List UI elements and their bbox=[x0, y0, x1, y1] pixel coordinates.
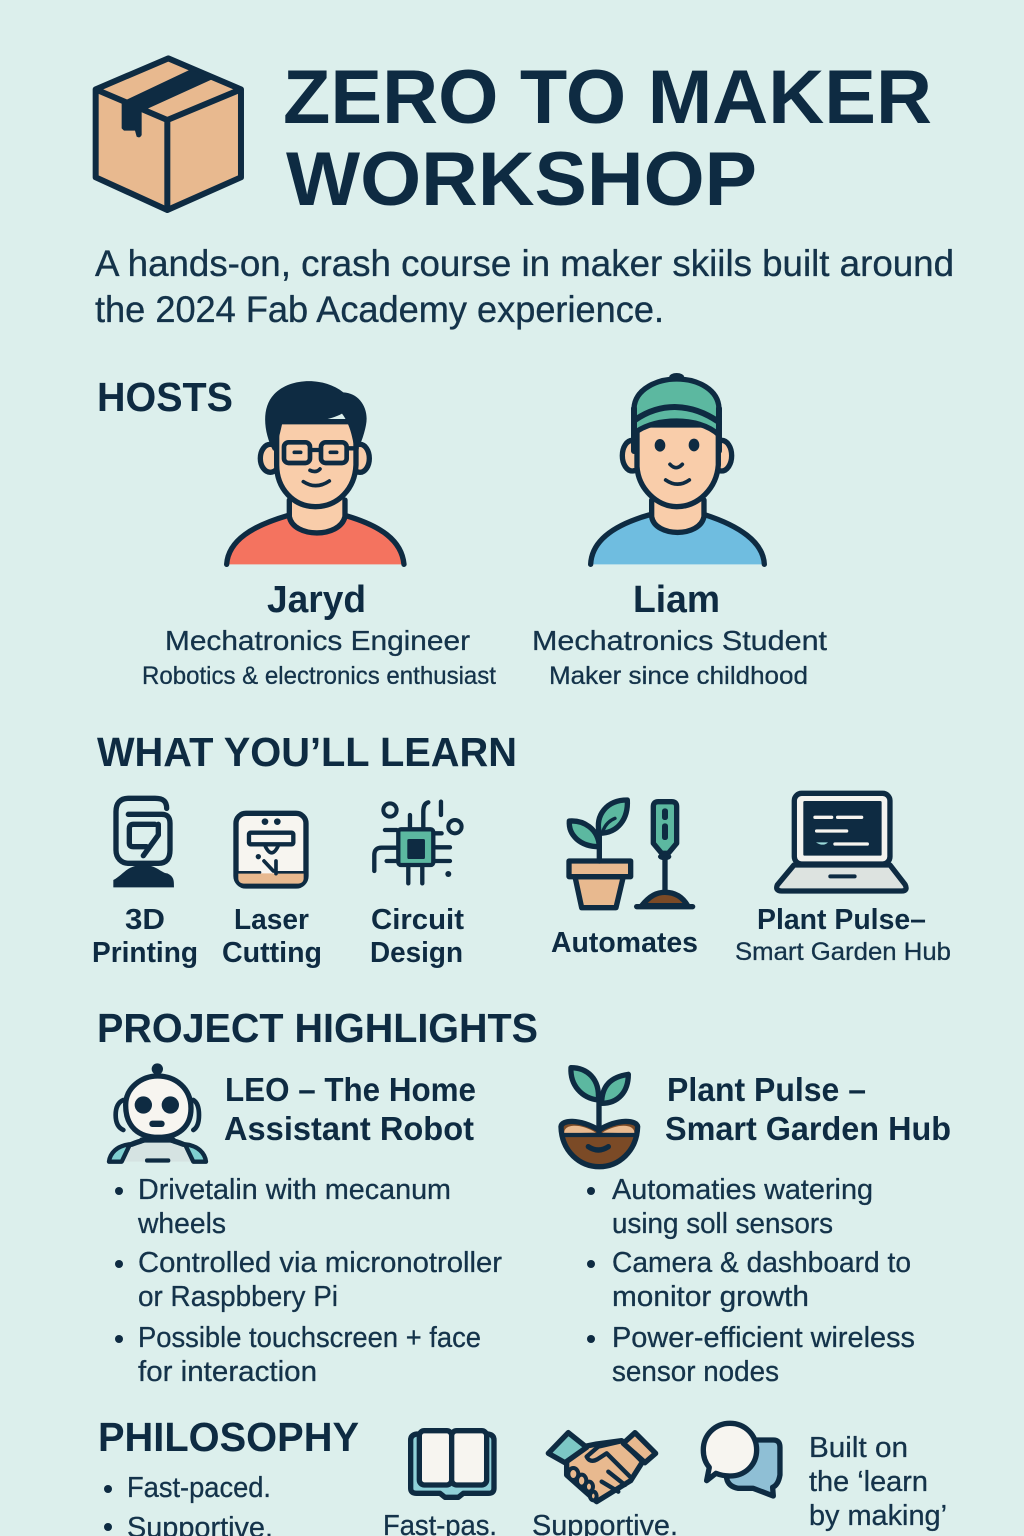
title bbox=[283, 55, 932, 222]
icon: circuit chip bbox=[374, 802, 462, 883]
host text: Jaryd: Robotics & electronics enthusiast bbox=[142, 662, 496, 690]
label: plant pulse smart garden hub bbox=[735, 904, 951, 966]
icon: sprout in soil bbox=[561, 1068, 638, 1167]
bullet list: Plant Pulse features: using soll sensors bbox=[612, 1208, 833, 1240]
subtitle: the 2024 Fab Academy experience. bbox=[95, 289, 664, 330]
panel: project highlights bbox=[97, 1005, 951, 1388]
bullet list: Plant Pulse features: Power-efficient wireless bbox=[612, 1322, 915, 1354]
label: 3D printing: Printing bbox=[92, 937, 198, 969]
bullet list: philosophy: Fast-paced. bbox=[127, 1472, 271, 1504]
label: plant pulse smart garden hub: Plant Pulse– bbox=[757, 904, 926, 936]
title: ZERO TO MAKER bbox=[283, 55, 932, 140]
label: circuit design bbox=[370, 904, 464, 969]
host text: Jaryd: Jaryd bbox=[267, 579, 366, 621]
icon: speech bubbles bbox=[703, 1423, 780, 1496]
host text: Liam bbox=[532, 579, 827, 690]
icon: 3D printer bbox=[113, 798, 174, 887]
label: laser cutting: Cutting bbox=[222, 937, 322, 969]
label: plant pulse smart garden hub: Smart Garden Hub bbox=[735, 938, 951, 966]
host text: Liam: Liam bbox=[633, 579, 720, 621]
project title: Plant Pulse bbox=[665, 1071, 951, 1147]
label: laser cutting bbox=[222, 904, 322, 969]
icon: potted plant and soil sensor bbox=[569, 800, 693, 908]
subtitle: A hands-on, crash course in maker skiils built around bbox=[95, 243, 954, 284]
host text: Liam: Mechatronics Student bbox=[532, 625, 827, 656]
label: circuit design: Circuit bbox=[371, 904, 464, 936]
bullet list: Plant Pulse features bbox=[587, 1174, 915, 1388]
panel: hosts bbox=[97, 373, 827, 690]
bullet list: LEO features: Controlled via micronotroller bbox=[138, 1247, 502, 1279]
icon: laser cutter bbox=[236, 813, 306, 886]
bullet list: Plant Pulse features: monitor growth bbox=[612, 1281, 809, 1313]
bullet list: LEO features bbox=[115, 1174, 502, 1388]
icon: open book bbox=[411, 1431, 494, 1497]
project title: LEO: LEO – The Home bbox=[225, 1071, 476, 1108]
label: 3D printing bbox=[92, 904, 198, 969]
panel: what you'll learn bbox=[92, 729, 951, 969]
label: 3D printing: 3D bbox=[125, 904, 165, 936]
subtitle bbox=[95, 243, 954, 330]
title: WORKSHOP bbox=[286, 137, 757, 222]
project title: LEO: Assistant Robot bbox=[224, 1110, 474, 1147]
heading: project highlights: PROJECT HIGHLIGHTS bbox=[97, 1005, 538, 1051]
icon: laptop bbox=[777, 793, 906, 891]
header bbox=[95, 55, 954, 330]
host: Liam avatar bbox=[591, 373, 764, 564]
bullet list: LEO features: or Raspbbery Pi bbox=[138, 1281, 338, 1313]
bullet list: philosophy bbox=[104, 1472, 273, 1536]
host text: Jaryd bbox=[142, 579, 496, 690]
text: built on learn by making: Built on bbox=[809, 1432, 908, 1464]
bullet list: Plant Pulse features: sensor nodes bbox=[612, 1356, 779, 1388]
bullet list: Plant Pulse features: Automaties watering bbox=[612, 1174, 873, 1206]
label: automates: Automates bbox=[551, 927, 698, 959]
bullet list: LEO features: for interaction bbox=[138, 1356, 317, 1388]
bullet list: LEO features: Possible touchscreen + face bbox=[138, 1322, 481, 1354]
bullet list: Plant Pulse features: Camera & dashboard to bbox=[612, 1247, 911, 1279]
heading: hosts: HOSTS bbox=[97, 374, 233, 420]
bullet list: LEO features: wheels bbox=[137, 1208, 226, 1240]
heading: philosophy: PHILOSOPHY bbox=[98, 1414, 359, 1460]
host: Jaryd avatar bbox=[227, 381, 404, 564]
icon: cardboard box bbox=[96, 58, 241, 210]
host text: Liam: Maker since childhood bbox=[549, 662, 808, 690]
text: built on learn by making: by making’ bbox=[809, 1500, 947, 1532]
project title: Plant Pulse: Plant Pulse – bbox=[667, 1071, 866, 1108]
project title: LEO bbox=[224, 1071, 476, 1147]
host text: Jaryd: Mechatronics Engineer bbox=[165, 625, 470, 656]
label: circuit design: Design bbox=[370, 937, 463, 969]
text: built on learn by making: the ‘learn bbox=[809, 1466, 928, 1498]
icon: handshake bbox=[548, 1433, 656, 1502]
project title: Plant Pulse: Smart Garden Hub bbox=[665, 1110, 951, 1147]
label: laser cutting: Laser bbox=[234, 904, 309, 936]
heading: what you'll learn: WHAT YOU’LL LEARN bbox=[97, 729, 517, 775]
text: built on learn by making bbox=[809, 1432, 947, 1532]
bullet list: LEO features: Drivetalin with mecanum bbox=[138, 1174, 451, 1206]
panel: philosophy bbox=[98, 1414, 947, 1536]
icon: robot bbox=[109, 1063, 206, 1163]
